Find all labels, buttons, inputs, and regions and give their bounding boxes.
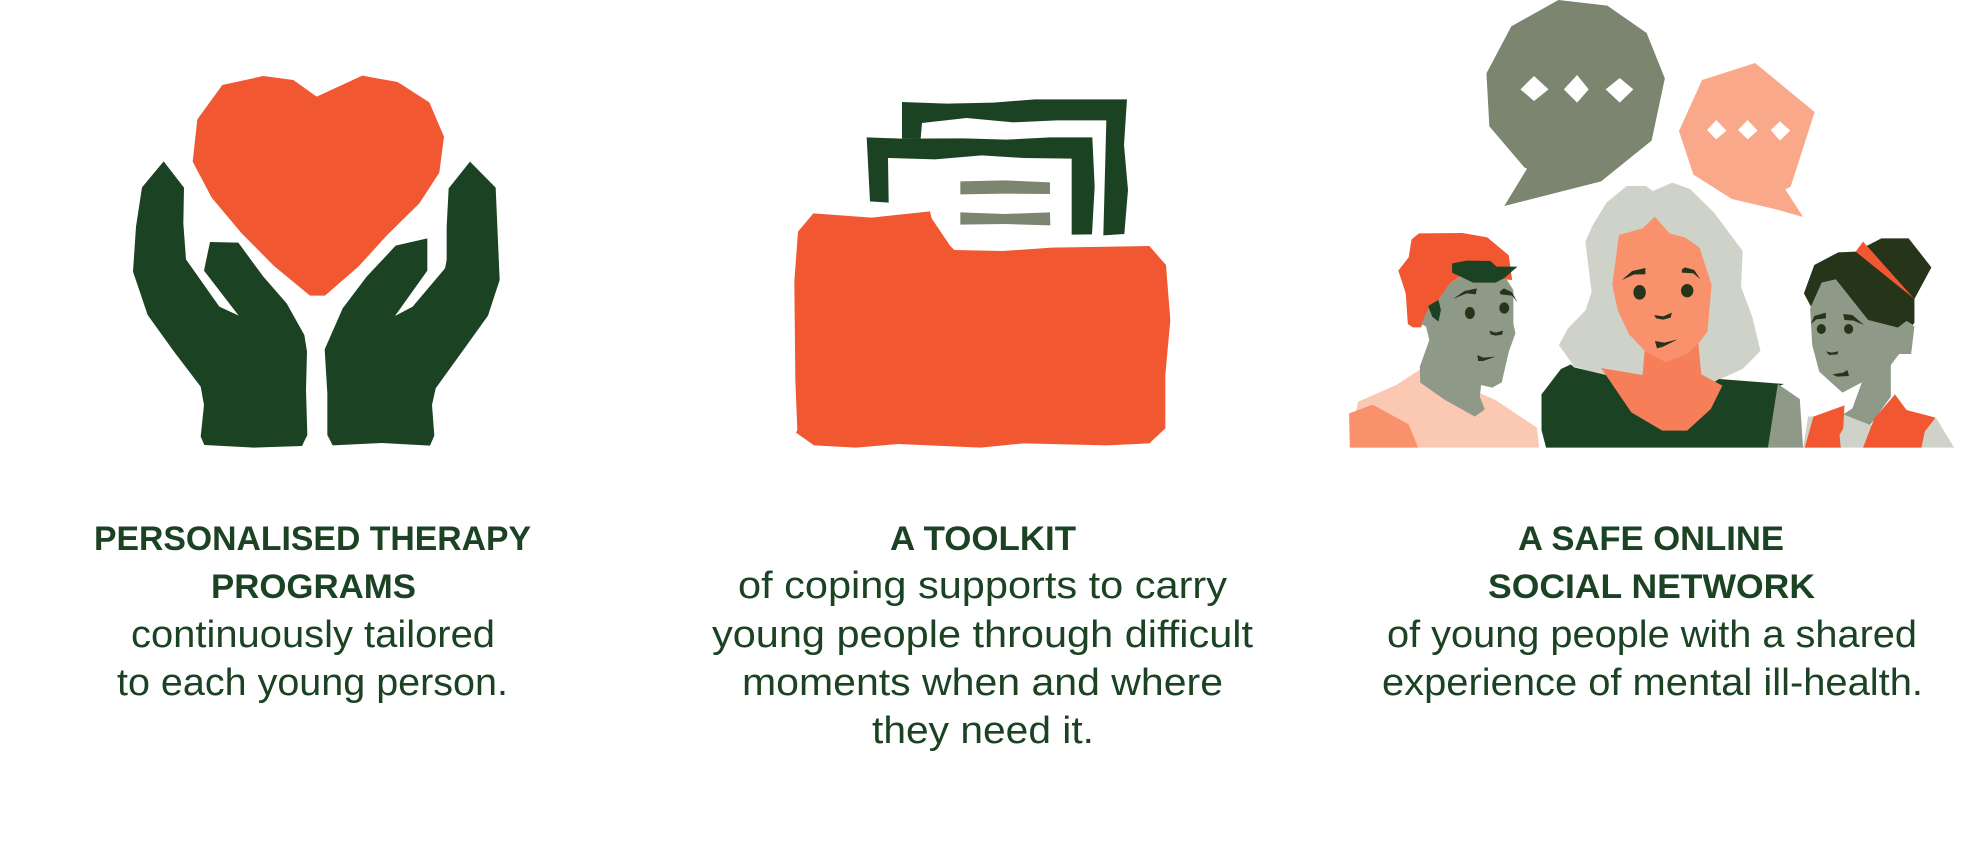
paper line one <box>960 180 1050 194</box>
back paper <box>902 99 1128 235</box>
speech bubble: small salmon <box>1679 63 1815 217</box>
panel: personalised therapy programs <box>94 76 531 704</box>
illustration: three young people <box>1349 183 1954 448</box>
body text: toolkit: young people through difficult <box>712 614 1253 656</box>
body text: toolkit: they need it. <box>872 710 1094 752</box>
body text: toolkit: of coping supports to carry <box>738 565 1227 607</box>
panel: safe online social network <box>1349 0 1954 704</box>
person: centre <box>1542 183 1803 448</box>
body text: toolkit: moments when and where <box>742 662 1223 704</box>
body text: social network <box>1382 614 1923 704</box>
heading: personalised therapy programs <box>94 520 531 606</box>
left hand <box>133 161 307 448</box>
person: right <box>1803 238 1954 448</box>
paper line two <box>960 212 1050 225</box>
icon: heart held in hands <box>133 76 500 448</box>
heading: a safe online social network: A SAFE ONLINE <box>1518 520 1784 558</box>
heading: personalised therapy programs: PERSONALISED THERAPY <box>94 520 531 558</box>
heading: a safe online social network <box>1488 520 1815 606</box>
front paper <box>867 137 1095 235</box>
body text: therapy programs: continuously tailored <box>131 614 495 656</box>
heading: personalised therapy programs: PROGRAMS <box>211 568 416 606</box>
heart <box>193 76 444 296</box>
text block: therapy programs <box>94 520 531 704</box>
body text: toolkit <box>712 565 1253 752</box>
person: left <box>1349 233 1539 448</box>
heading: a safe online social network: SOCIAL NETWORK <box>1488 568 1815 606</box>
icon: folder with papers <box>794 99 1170 448</box>
panel: toolkit <box>712 99 1253 752</box>
text block: toolkit <box>712 520 1253 752</box>
illustration: speech bubbles <box>1486 0 1815 217</box>
heading: a toolkit: A TOOLKIT <box>890 520 1076 558</box>
body text: social network: of young people with a shared <box>1387 614 1917 656</box>
folder <box>794 211 1170 448</box>
body text: social network: experience of mental ill-health. <box>1382 662 1923 704</box>
speech bubble: large sage <box>1486 0 1665 206</box>
right hand <box>325 162 500 446</box>
body text: therapy programs: to each young person. <box>117 662 508 704</box>
body text: therapy programs <box>117 614 508 704</box>
text block: social network <box>1382 520 1923 704</box>
